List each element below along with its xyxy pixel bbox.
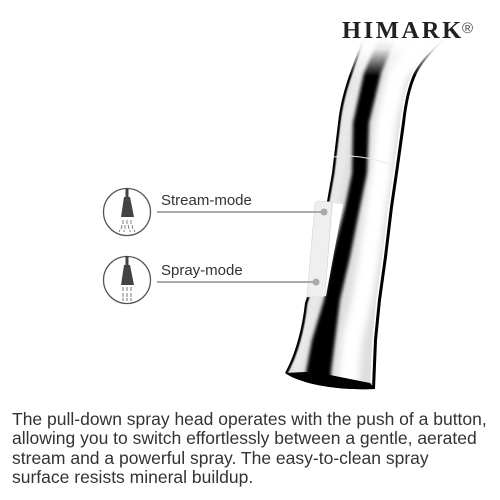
- description text: The pull-down spray head operates with the push of a button,: [12, 409, 487, 429]
- leader line: stream mode: [157, 208, 328, 216]
- icon: spray mode: [104, 256, 150, 304]
- logo: HIMARK: HIMARK: [342, 17, 464, 44]
- logo: registered mark: ®: [462, 20, 473, 37]
- label: spray mode: Spray-mode: [161, 262, 243, 279]
- right edge: [375, 40, 445, 389]
- bottom rim: [285, 372, 376, 390]
- spray button: [307, 201, 332, 297]
- left highlight: [295, 68, 362, 370]
- leader line: spray mode: [157, 278, 320, 286]
- left edge: [285, 40, 362, 373]
- seam ring: [334, 156, 394, 166]
- icon: stream mode: [104, 188, 150, 236]
- description text: surface resists mineral buildup.: [12, 467, 253, 487]
- label: stream mode: Stream-mode: [161, 192, 252, 209]
- faucet spray head: [285, 42, 442, 390]
- central dark band: [306, 40, 395, 392]
- description text: stream and a powerful spray. The easy-to-clean spray: [12, 448, 429, 468]
- right highlight: [348, 40, 425, 385]
- right chrome line: [371, 40, 441, 382]
- description text: allowing you to switch effortlessly between a gentle, aerated: [12, 428, 477, 448]
- description text: [12, 409, 487, 487]
- top fade: [340, 38, 455, 76]
